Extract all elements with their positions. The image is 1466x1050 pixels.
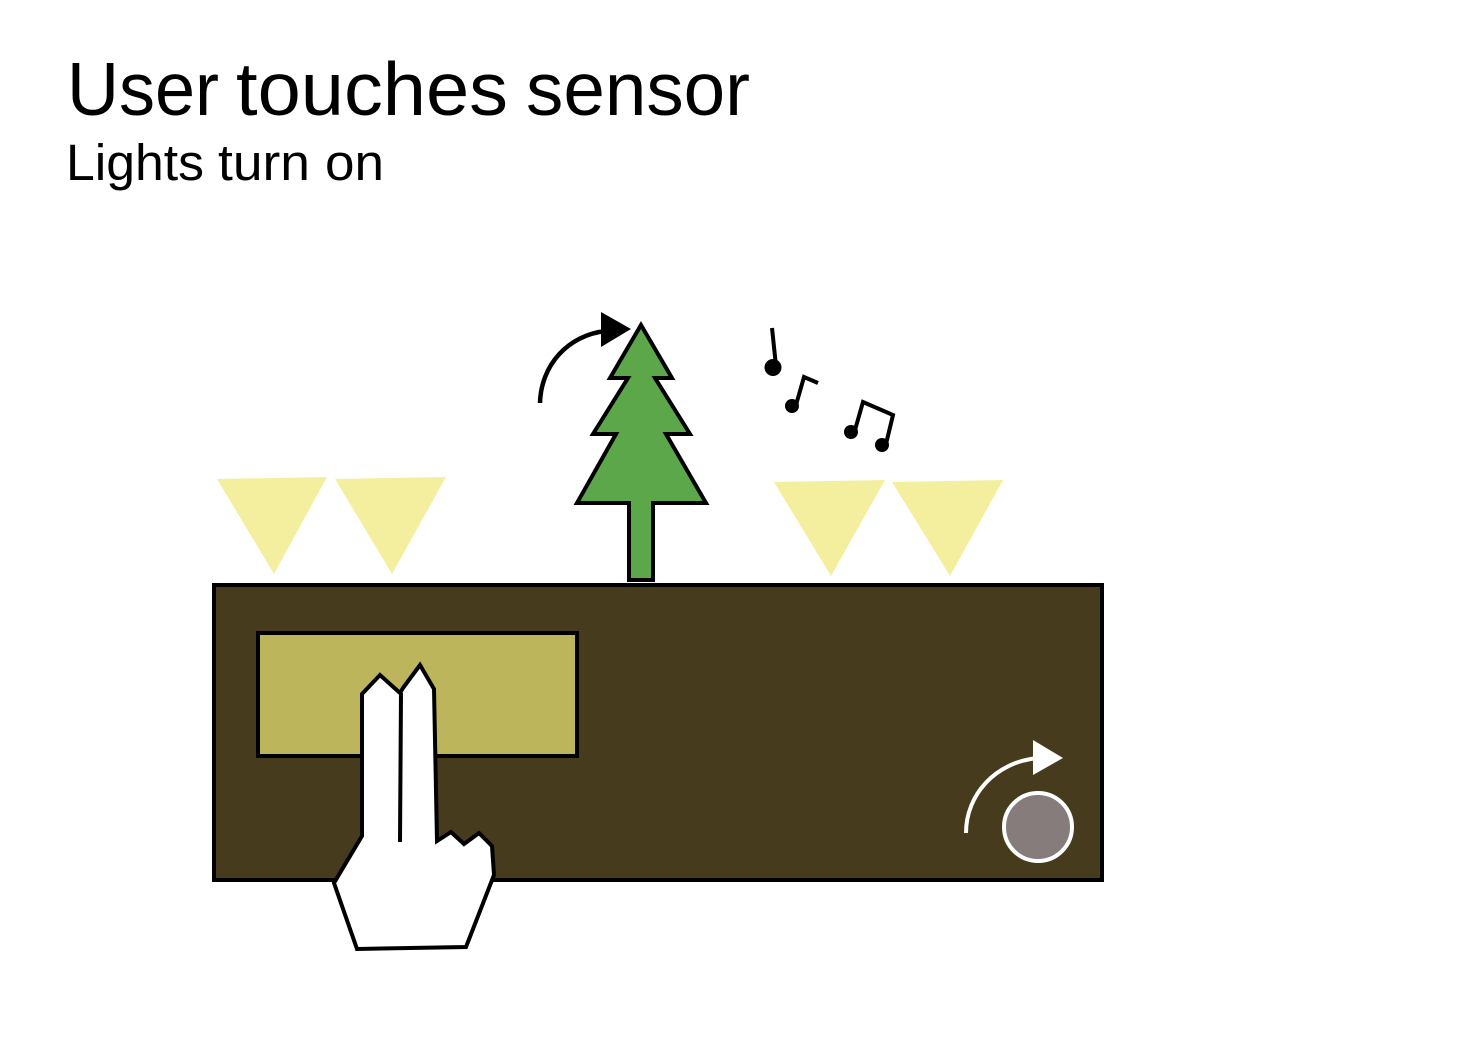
title [67,47,750,131]
lights: left pair [217,477,446,574]
sensor panel [258,633,577,756]
base box [214,585,1102,880]
tree [577,325,706,580]
lights: right pair [774,480,1003,576]
hand [334,665,494,949]
arrow: tree rotation [540,312,631,403]
title: sensor [526,47,750,131]
subtitle: turn [218,134,310,191]
subtitle: Lights [66,134,204,191]
subtitle [66,134,384,191]
title: touches [236,47,508,131]
subtitle: on [325,134,384,191]
arrow: knob rotation [966,740,1063,833]
title: User [67,47,219,131]
knob [1004,793,1072,861]
music notes [764,328,893,452]
